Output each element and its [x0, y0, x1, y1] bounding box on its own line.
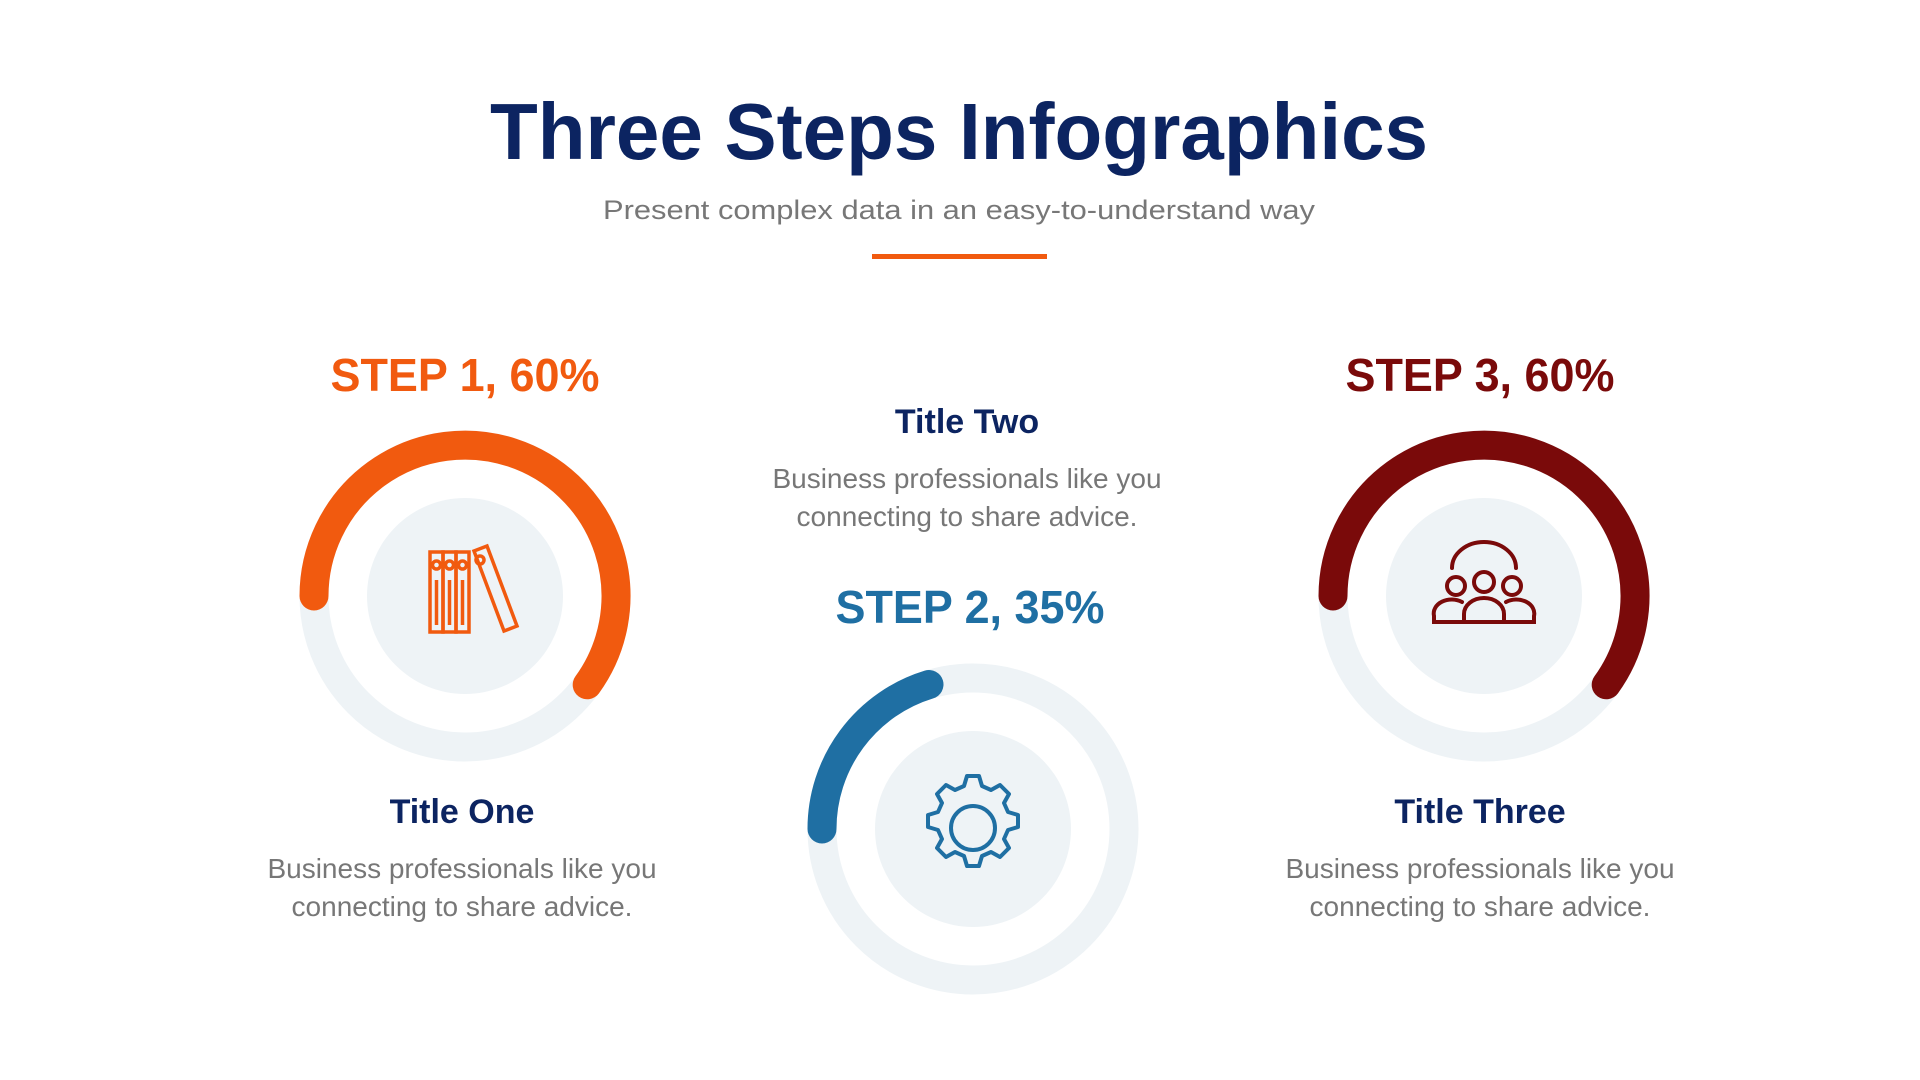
accent line: [872, 254, 1047, 259]
panel: step 2: connecting to share advice.: [797, 501, 1137, 532]
title: Three Steps Infographics: [490, 87, 1428, 176]
step 2 heading: STEP 2, 35%: [836, 581, 1104, 633]
step 3 heading: STEP 3, 60%: [1346, 349, 1614, 401]
icon: books: [430, 546, 517, 632]
panel: step 2: [772, 403, 1162, 980]
panel: step 1: [267, 349, 657, 922]
icon: gear: [928, 776, 1018, 866]
title two: Title Two: [895, 403, 1039, 441]
panel: step 3: connecting to share advice.: [1310, 891, 1650, 922]
panel: step 3: [1285, 349, 1675, 922]
step 1 ring: [314, 445, 616, 747]
text two: Business professionals like you: [772, 463, 1162, 494]
panel: step 1: connecting to share advice.: [292, 891, 632, 922]
text three: Business professionals like you: [1285, 853, 1675, 884]
text one: Business professionals like you: [267, 853, 657, 884]
step 2 ring: [822, 678, 1124, 980]
title one: Title One: [390, 793, 534, 831]
title three: Title Three: [1394, 793, 1566, 831]
icon: people: [1434, 542, 1534, 622]
step 3 ring: [1333, 445, 1635, 747]
step 1 heading: STEP 1, 60%: [330, 349, 600, 401]
subtitle: Present complex data in an easy-to-understand way: [603, 195, 1316, 225]
